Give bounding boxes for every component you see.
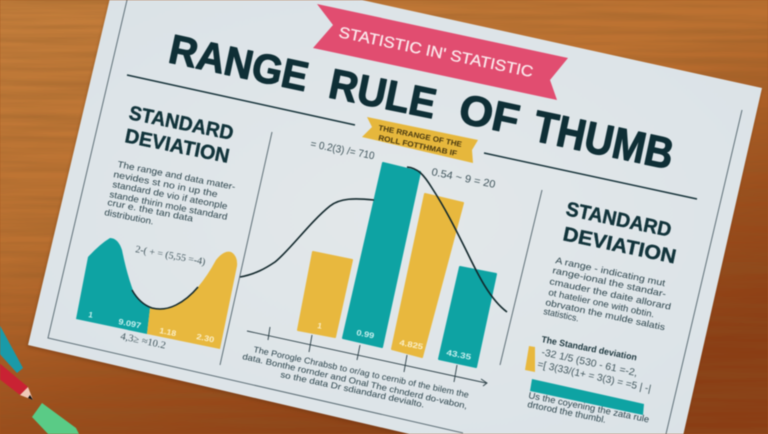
title rule lines — [127, 75, 697, 199]
left body text: distribution. — [104, 207, 155, 227]
right heading: STANDARD — [564, 198, 673, 242]
left body text: crur e. the tan data — [107, 197, 194, 224]
yellow key mark — [525, 346, 535, 372]
banner text: STATISTIC IN' STATISTIC — [337, 24, 535, 81]
left bell chart — [76, 238, 237, 351]
left bell chart: 2.30 — [196, 332, 216, 345]
right body text: range-ional the standar- — [552, 265, 667, 299]
yellow ribbon subtitle: ROLL FOTTHMAB IF — [378, 133, 458, 158]
chart caption: data. Bonthe rornder and Onal The chnderd do-vabon, — [242, 351, 468, 411]
left bell chart: 1 — [88, 310, 94, 320]
formula lines: =[ 3(33/(1+ = 3(3) = =5 | -| — [536, 359, 652, 395]
yellow ribbon subtitle — [362, 117, 478, 163]
left bell chart: 4,3≥ ≈10.2 — [119, 331, 167, 351]
right body text: ot hatelier one with obtin. — [548, 287, 655, 319]
left body text: nevides st no in up the — [113, 169, 219, 199]
icon: green pencil — [32, 403, 80, 434]
right body text: A range - indicating mut — [555, 255, 667, 288]
chart caption: The Porogle Chrabsb to or/ag to cernib of the bilem the — [253, 344, 470, 400]
left bell chart: 9.097 — [118, 317, 143, 330]
x axis — [247, 327, 487, 386]
title — [165, 26, 678, 179]
formula lines: -32 1/5 (530 - 61 =-2, — [540, 347, 638, 379]
bar chart: 4.825 — [399, 338, 425, 352]
title: THUMB — [529, 102, 678, 179]
right footer text: drtorod the thumbl. — [527, 399, 607, 425]
right body text — [543, 255, 672, 332]
title: RANGE — [165, 26, 313, 100]
right footer text: Us the coyening the zata rule — [528, 390, 650, 424]
right heading: DEVIATION — [561, 223, 678, 268]
title: OF — [455, 85, 524, 143]
bar chart: 0.99 — [356, 328, 376, 341]
panel: right standard deviation — [525, 198, 678, 425]
icon: red pencil — [0, 362, 33, 400]
right heading — [561, 198, 678, 268]
left bell chart: 2-( + = (5,55 =-4) — [134, 244, 206, 268]
left heading — [123, 102, 235, 168]
right body text: statistics. — [543, 306, 580, 323]
panel: center chart — [240, 138, 507, 411]
standard deviation subheading: The Standard deviation — [541, 334, 638, 362]
chart formula labels: = 0.2(3) /= 710 — [309, 138, 376, 162]
pink ribbon banner — [313, 4, 568, 100]
title: RULE — [325, 60, 440, 127]
left bell chart: 1.18 — [159, 326, 178, 338]
yellow ribbon subtitle: THE RRANGE OF THE — [378, 123, 463, 149]
bell curve line — [240, 167, 507, 312]
left body text — [104, 159, 236, 227]
left body text: stande thirin mole standard — [109, 189, 228, 222]
bar chart — [298, 163, 496, 367]
left body text: The range and data mater- — [117, 159, 236, 192]
right body text: cmauder the daite allorard — [549, 276, 672, 312]
left heading: DEVIATION — [123, 125, 231, 168]
teal key bar — [530, 379, 644, 415]
left body text: standard de vio if ateonple — [112, 179, 228, 211]
panel: left standard deviation — [76, 102, 237, 351]
chart formula labels — [309, 138, 497, 191]
left heading: STANDARD — [127, 102, 235, 145]
right body text: obrvaton the mulde salatis — [545, 297, 667, 332]
bar chart: 43.35 — [446, 348, 473, 362]
icon: teal pencil — [0, 322, 23, 373]
chart caption: so the data Dr sdiandard devialto. — [280, 369, 425, 410]
bar chart: 1 — [317, 321, 323, 331]
chart formula labels: 0.54 ~ 9 = 20 — [430, 166, 497, 191]
